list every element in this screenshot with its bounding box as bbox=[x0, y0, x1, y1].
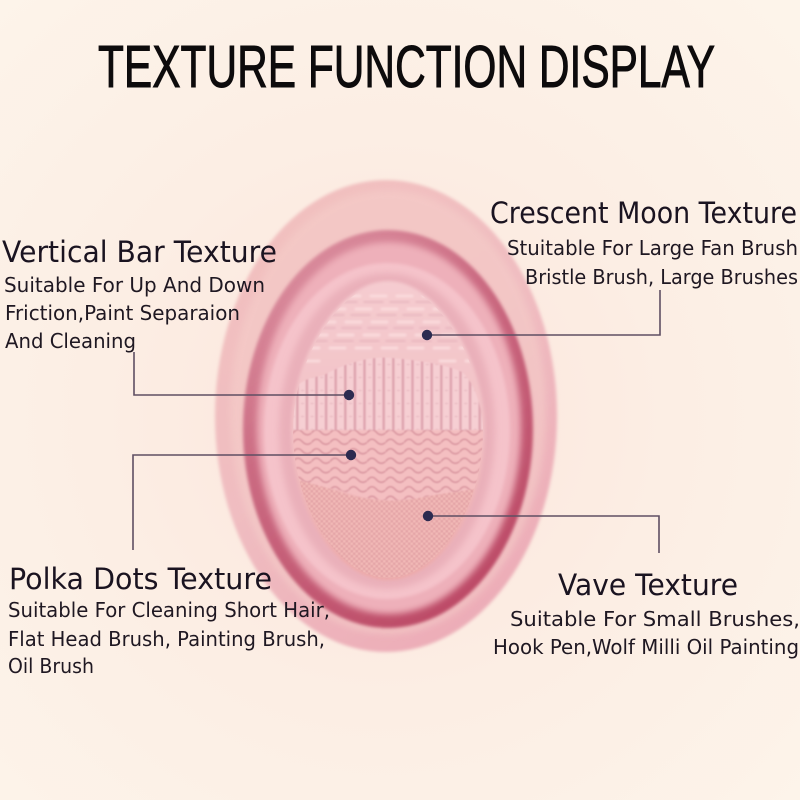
leader line: crescent moon bbox=[422, 290, 660, 340]
text block: vave texture bbox=[493, 568, 800, 659]
description: polka dots texture: Flat Head Brush, Painting Brush, bbox=[8, 627, 325, 651]
dot: polka dots bbox=[346, 450, 356, 460]
description: vertical bar texture bbox=[4, 273, 265, 353]
text block: vertical bar texture bbox=[2, 235, 277, 353]
dot: vave bbox=[423, 511, 433, 521]
raised inner lip bbox=[264, 263, 510, 599]
wave texture bbox=[290, 430, 486, 501]
text block: crescent moon texture bbox=[490, 196, 798, 289]
heading: polka dots texture: Polka Dots Texture bbox=[9, 562, 272, 596]
description: polka dots texture: Oil Brush bbox=[8, 654, 94, 678]
description: vertical bar texture: And Cleaning bbox=[5, 329, 136, 353]
leader line: vertical bar bbox=[134, 352, 354, 400]
heading: vertical bar texture: Vertical Bar Texture bbox=[2, 235, 277, 269]
description: vertical bar texture: Suitable For Up And Down bbox=[4, 273, 265, 297]
leader line: vave bbox=[423, 511, 659, 553]
textures bbox=[290, 296, 486, 590]
description: polka dots texture bbox=[8, 598, 330, 678]
description: vave texture: Hook Pen,Wolf Milli Oil Painting bbox=[493, 635, 799, 659]
description: crescent moon texture: Stuitable For Large Fan Brush bbox=[507, 236, 798, 260]
description: polka dots texture: Suitable For Cleaning Short Hair, bbox=[8, 598, 330, 622]
leader line: polka dots bbox=[133, 450, 356, 550]
polka dot texture bbox=[300, 480, 474, 578]
description: crescent moon texture: Bristle Brush, Large Brushes bbox=[525, 265, 798, 289]
vertical bar texture bbox=[293, 358, 484, 432]
heading: vave texture: Vave Texture bbox=[558, 568, 738, 602]
text block: polka dots texture bbox=[8, 562, 330, 678]
texture pad bbox=[291, 281, 485, 580]
outer flange bbox=[215, 180, 557, 652]
description: vertical bar texture: Friction,Paint Separaion bbox=[5, 301, 240, 325]
description: vave texture: Suitable For Small Brushes, bbox=[510, 607, 800, 631]
description: vave texture bbox=[493, 607, 800, 659]
dark groove ring bbox=[243, 230, 533, 628]
crescent moon texture bbox=[304, 296, 482, 361]
dot: crescent moon bbox=[422, 330, 432, 340]
dot: vertical bar bbox=[344, 390, 354, 400]
product: silicone brush cleaning bowl bbox=[215, 180, 557, 652]
description: crescent moon texture bbox=[507, 236, 798, 289]
